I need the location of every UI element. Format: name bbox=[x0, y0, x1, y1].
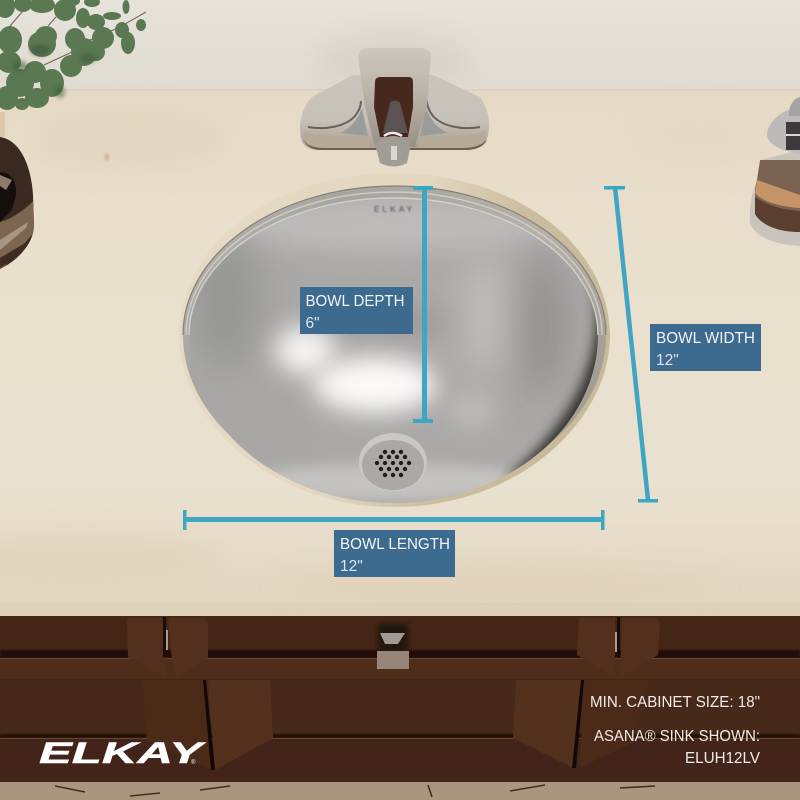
text: cabinet size and model: ELUH12LV bbox=[685, 750, 760, 767]
lower panel bbox=[0, 680, 800, 736]
left valve bbox=[340, 108, 368, 136]
label: bowl length bbox=[334, 530, 455, 577]
plant leaves bbox=[0, 0, 146, 110]
measure: bowl length line bbox=[183, 510, 604, 530]
central housing bbox=[358, 48, 431, 147]
vase neck bbox=[0, 112, 5, 137]
cabinet handle bbox=[377, 624, 409, 669]
stone cutout lip bbox=[179, 173, 610, 507]
text: cabinet size and model bbox=[590, 694, 760, 767]
label: bowl depth: 6" bbox=[306, 315, 320, 332]
measure: bowl width line bbox=[604, 186, 658, 502]
cabinet bbox=[0, 616, 800, 782]
wall background bbox=[0, 0, 800, 90]
logo: Elkay: ® bbox=[191, 759, 196, 766]
label: bowl depth bbox=[300, 287, 413, 334]
text: cabinet size and model: ASANA® SINK SHOWN: bbox=[594, 728, 760, 745]
left mitre pieces bbox=[127, 618, 167, 678]
lower rail bbox=[0, 738, 800, 782]
right valve bbox=[420, 108, 448, 136]
label: bowl width bbox=[650, 324, 761, 371]
faucet bbox=[300, 30, 489, 166]
drawer panel bbox=[0, 617, 800, 654]
right mitre pieces bbox=[577, 618, 615, 677]
measure: bowl depth line bbox=[413, 186, 433, 423]
spout bbox=[383, 101, 408, 133]
sink bbox=[179, 173, 620, 507]
label: bowl length: BOWL LENGTH bbox=[340, 536, 450, 553]
label: bowl width: BOWL WIDTH bbox=[656, 330, 755, 347]
vase bbox=[0, 137, 34, 269]
label: bowl length: 12" bbox=[340, 558, 363, 575]
bowl bbox=[189, 198, 598, 503]
spout tip bbox=[375, 136, 411, 166]
countertop bbox=[0, 89, 800, 616]
label: bowl depth: BOWL DEPTH bbox=[306, 293, 404, 310]
drain bbox=[359, 433, 427, 491]
engraved logo: ELKAY bbox=[374, 205, 413, 214]
base plate bbox=[300, 75, 489, 150]
rim highlights bbox=[189, 198, 598, 335]
text: cabinet size and model: MIN. CABINET SIZE: 18" bbox=[590, 694, 760, 711]
label: bowl width: 12" bbox=[656, 352, 679, 369]
rim bbox=[183, 186, 606, 495]
drawer rail bbox=[0, 658, 800, 679]
logo: Elkay bbox=[39, 737, 207, 770]
housing opening bbox=[374, 77, 413, 137]
perfume bottle bbox=[750, 97, 800, 246]
logo: Elkay: ELKAY bbox=[39, 737, 207, 770]
floor bbox=[0, 782, 800, 800]
